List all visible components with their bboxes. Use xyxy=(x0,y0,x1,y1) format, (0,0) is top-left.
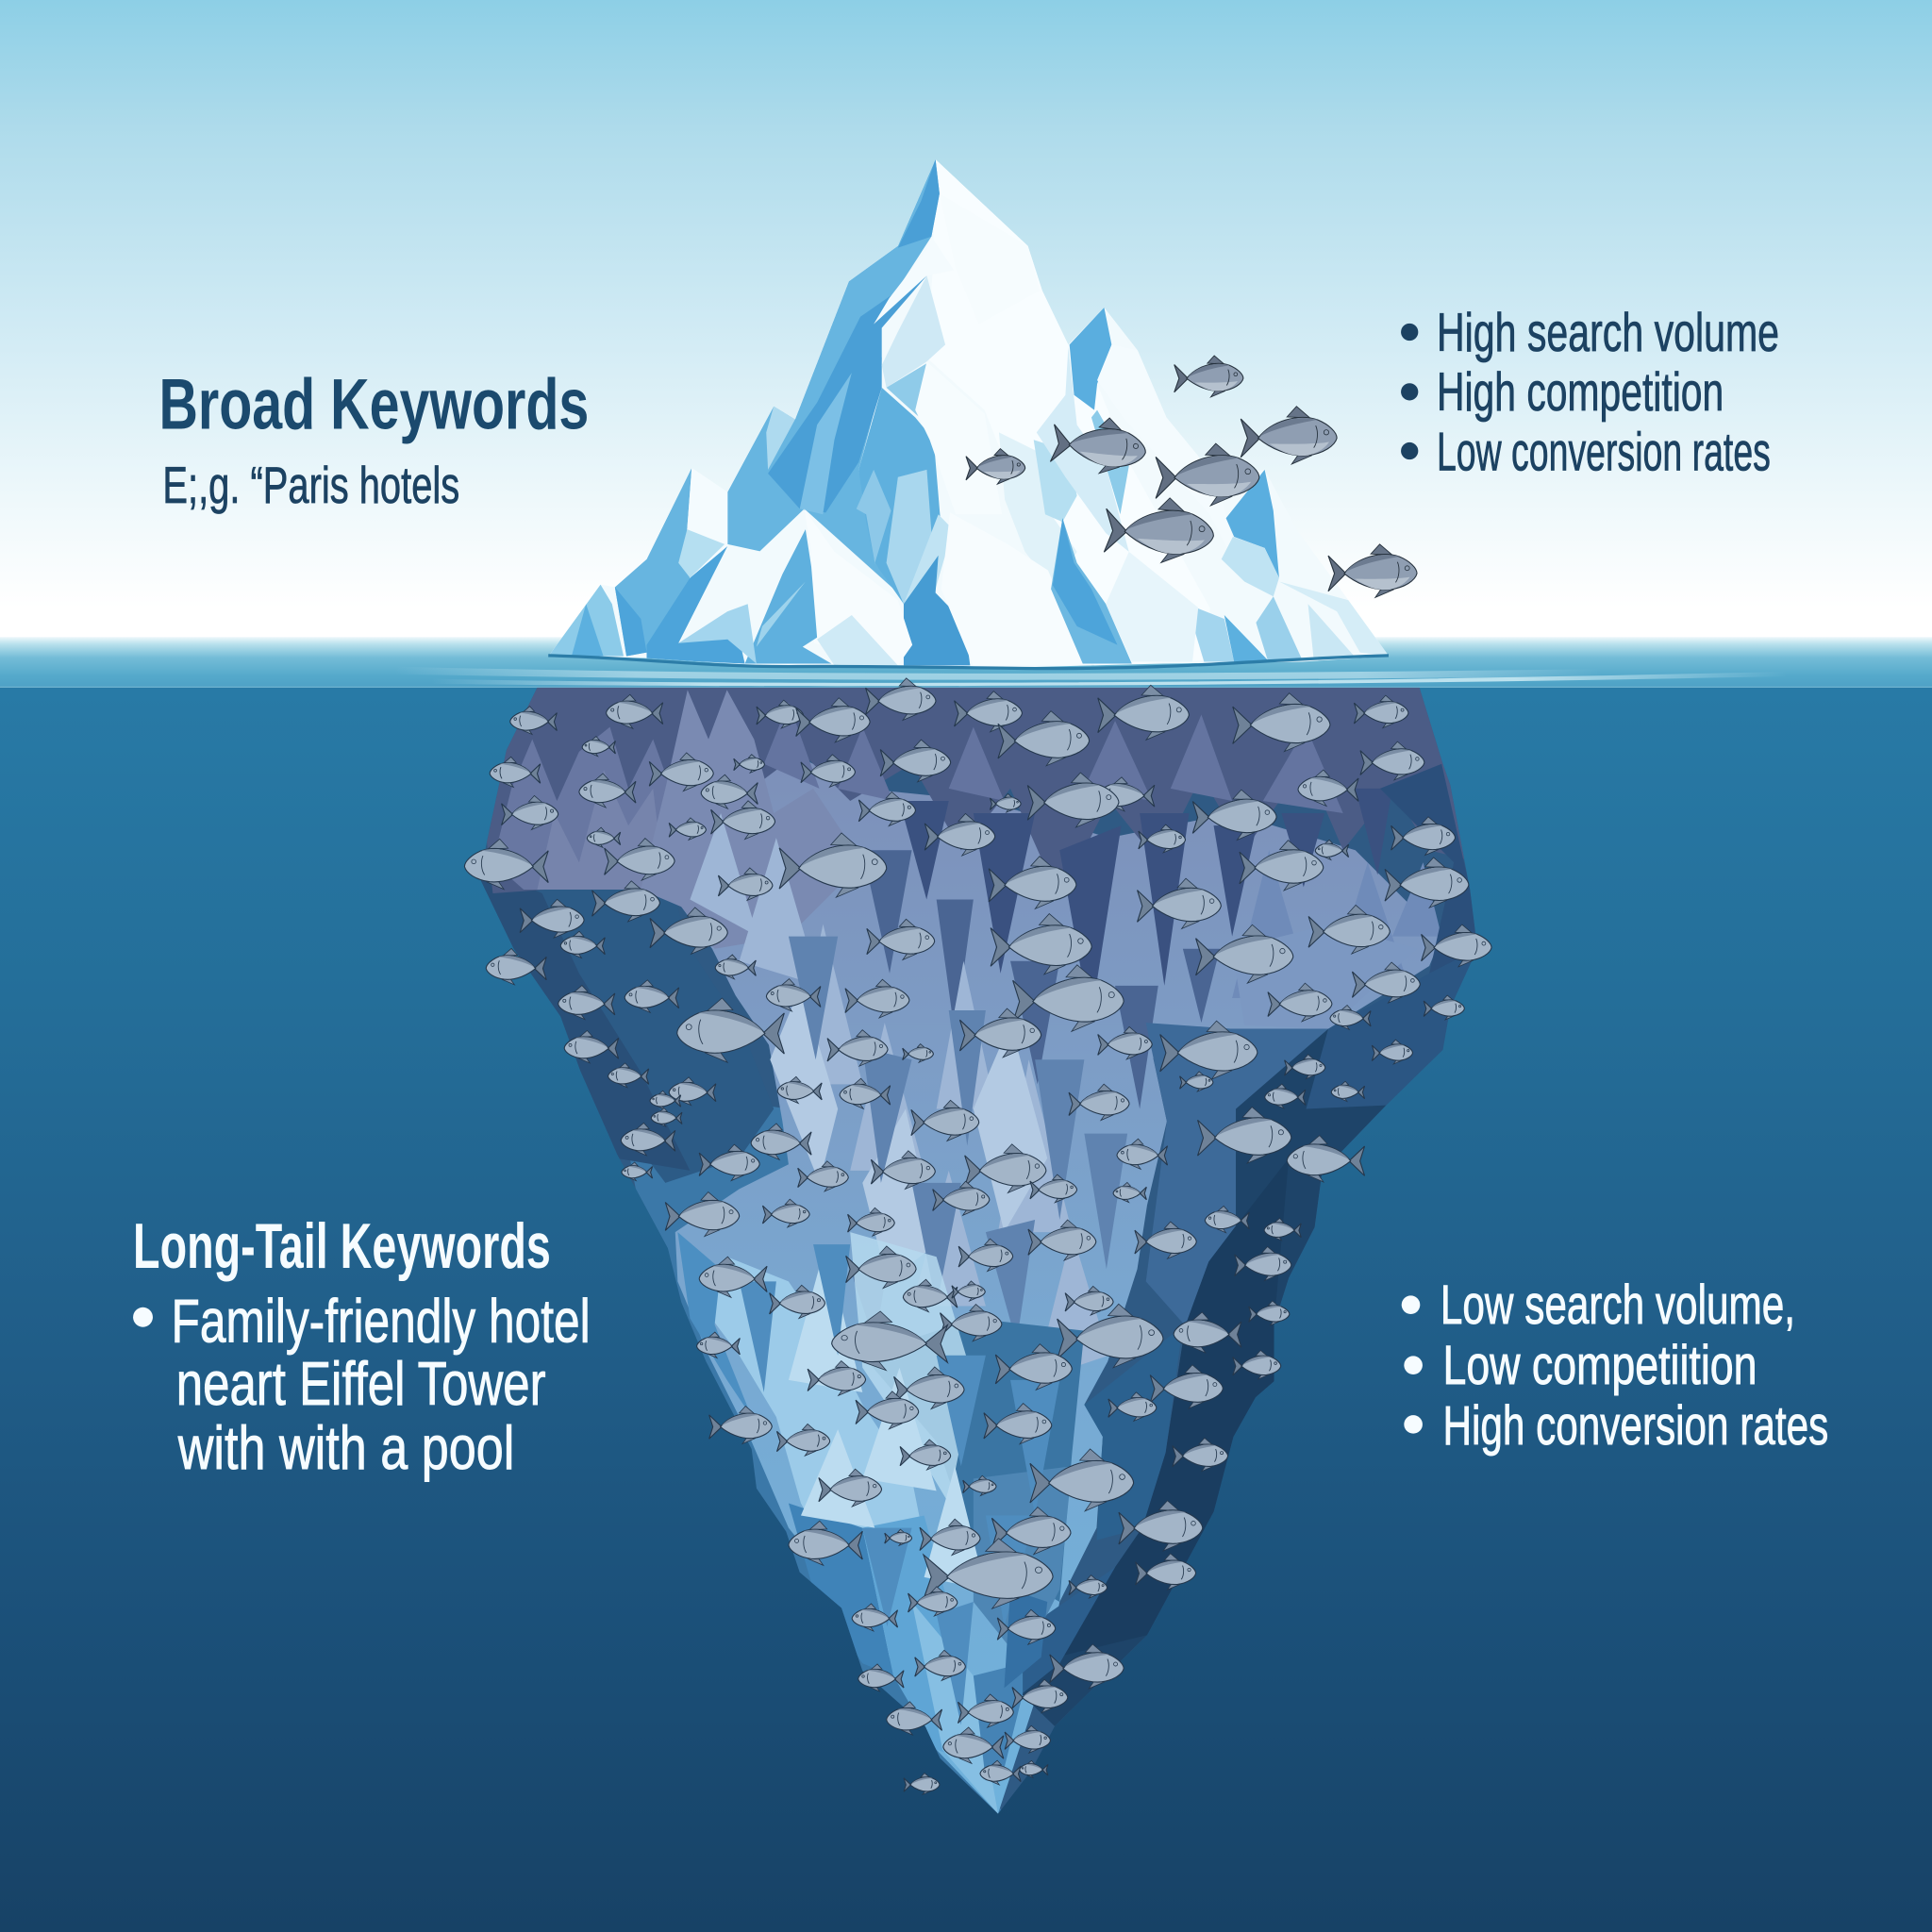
heading and text: long-tail keywords: Family-friendly hotel xyxy=(172,1286,591,1355)
iceberg tip above water xyxy=(528,142,1407,671)
heading: Broad Keywords: Broad Keywords xyxy=(158,365,589,445)
sky background xyxy=(0,0,1932,640)
heading and text: long-tail keywords xyxy=(133,1211,591,1482)
heading and text: long-tail keywords: Long-Tail Keywords xyxy=(133,1211,551,1282)
fish above water xyxy=(966,356,1417,597)
sea surface band xyxy=(0,637,1932,689)
heading and text: long-tail keywords: neart Eiffel Tower xyxy=(176,1349,546,1418)
list: broad keyword traits: High competition xyxy=(1437,362,1724,423)
waterline and surface ripples xyxy=(394,656,1787,686)
list: long-tail keyword traits: Low competiition xyxy=(1442,1335,1757,1396)
fish school below water xyxy=(464,678,1491,1794)
submerged iceberg xyxy=(468,684,1491,1824)
text: broad keyword example: E;,g. “Paris hotels xyxy=(162,456,459,514)
list: long-tail keyword traits xyxy=(1402,1274,1828,1457)
list: broad keyword traits: High search volume xyxy=(1437,303,1779,363)
list: broad keyword traits xyxy=(1401,303,1779,482)
list: long-tail keyword traits: Low search volume, xyxy=(1441,1274,1795,1336)
deep water background xyxy=(0,688,1932,1932)
heading and text: long-tail keywords: with with a pool xyxy=(177,1413,514,1482)
